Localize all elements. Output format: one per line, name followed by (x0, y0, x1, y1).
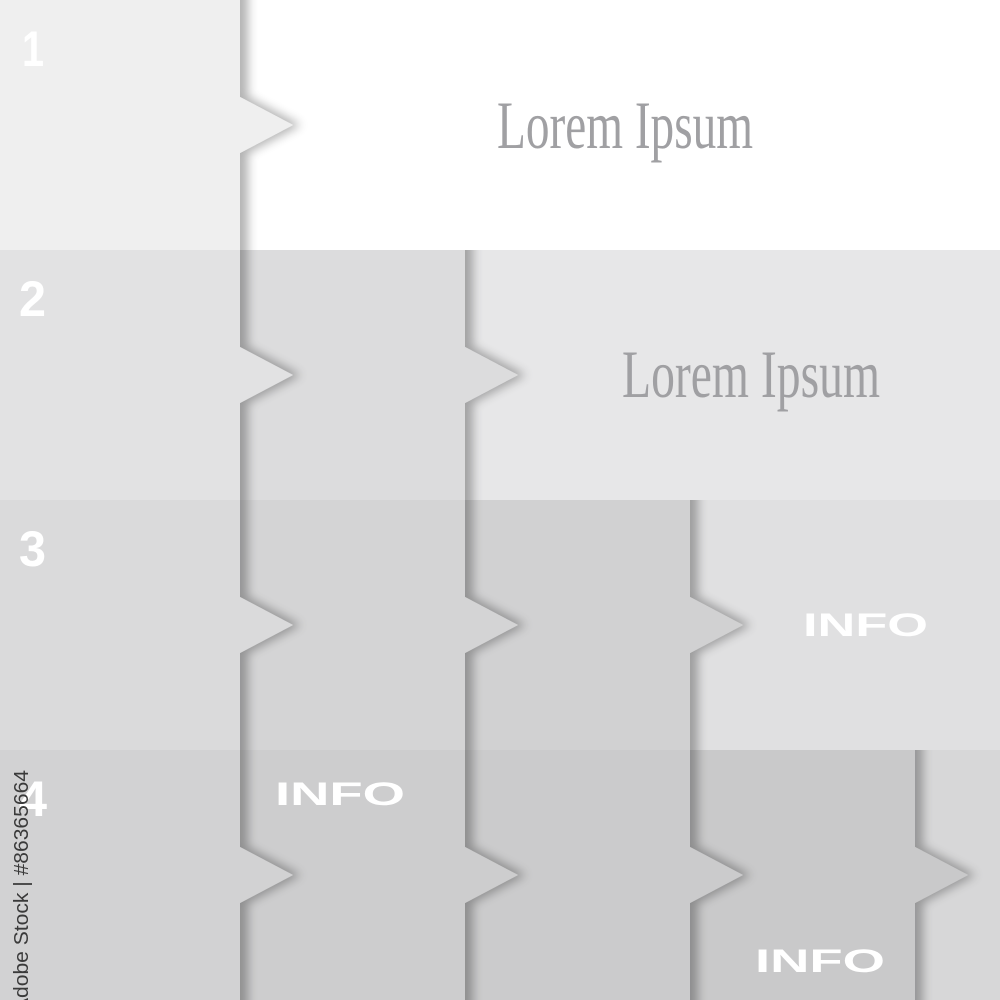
heading: Lorem Ipsum 1: Lorem Ipsum (497, 87, 753, 163)
row 4 (0, 730, 1000, 1000)
number 2: 2 (19, 271, 46, 327)
panel: row 3 column 2 (465, 500, 526, 750)
panel: row 4 column 1 (240, 750, 301, 1000)
panel: row 4 column 4 (690, 750, 976, 1000)
label: INFO row 4 left: INFO (275, 776, 405, 812)
number 4: 4 (19, 771, 47, 827)
panel: row 2 column 2 (243, 250, 526, 500)
heading: Lorem Ipsum 2: Lorem Ipsum (622, 336, 880, 412)
label: INFO row 3: INFO (803, 607, 928, 643)
row 2 (0, 250, 1000, 500)
row 3 (0, 500, 1000, 750)
panel: row 3 column 3 (465, 500, 752, 750)
panel: row 4 column 3 (690, 750, 751, 1000)
panel: row 1 column 1 with arrow (0, 0, 293, 270)
row 1 (0, 0, 302, 250)
label: INFO row 4 right: INFO (755, 943, 885, 979)
number 1: 1 (22, 21, 44, 77)
panel: row 4 column 2 (465, 750, 526, 1000)
panel: row 3 column 1 (240, 500, 301, 750)
number 3: 3 (19, 521, 46, 577)
panel: row 2 column 1 (240, 250, 302, 500)
